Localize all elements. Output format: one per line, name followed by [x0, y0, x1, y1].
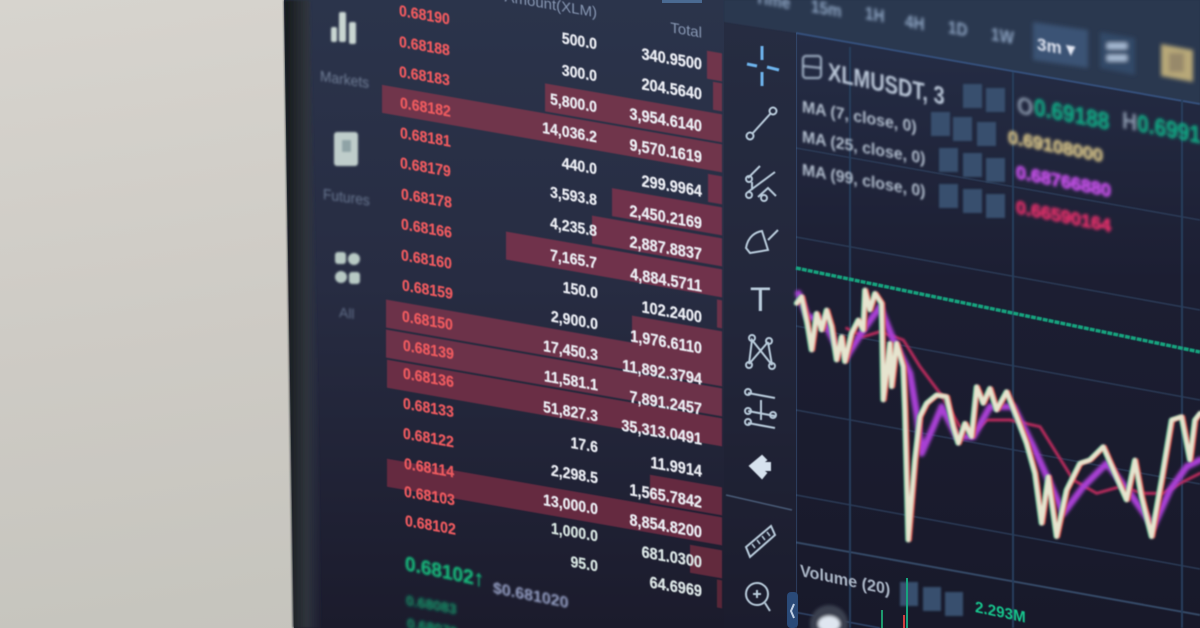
tab strip: 1D [948, 17, 968, 41]
amount column: 500.0 [562, 30, 597, 54]
total column: 1,976.6110 [630, 328, 702, 358]
price column: 0.68114 [404, 455, 455, 482]
sidebar icon: all [335, 252, 360, 284]
amount column: 95.0 [571, 553, 598, 576]
price column: 0.68183 [399, 63, 450, 90]
tool: back arrow [750, 456, 770, 478]
high label and value: H0.6991 [1122, 106, 1200, 149]
symbol legend [802, 56, 945, 201]
total column: 7,891.2457 [629, 388, 702, 419]
total column: 340.9500 [642, 46, 702, 74]
MA 25 line [798, 293, 1200, 527]
last price value: 0.68102↑ [405, 550, 484, 592]
header accent bar [662, 0, 702, 3]
tool: crosshair [747, 46, 779, 86]
price column: 0.68122 [403, 425, 454, 452]
monitor screen [284, 0, 1200, 628]
price column: 0.68103 [404, 483, 455, 510]
MA 99 line [847, 328, 1200, 493]
price column [399, 2, 456, 539]
candlesticks red edge [799, 290, 1200, 540]
price column: 0.68160 [401, 246, 452, 273]
price column: 0.68136 [403, 365, 454, 392]
tab strip: 1W [991, 24, 1014, 48]
MA 25 value: 0.68766880 [1016, 162, 1111, 201]
total column: 681.0300 [642, 544, 702, 572]
amount column: 11,581.1 [544, 367, 598, 395]
amount column: 4,235.8 [550, 215, 597, 241]
header: Total: Total [670, 19, 702, 42]
price column: 0.68150 [402, 308, 453, 334]
legend: MA 7: MA (7, close, 0) [802, 98, 917, 136]
amount column: 3,593.8 [550, 184, 597, 210]
tool: fork [746, 166, 776, 201]
volume control buttons [900, 582, 963, 616]
sidebar icon: markets [331, 12, 356, 44]
tool: measure lines [745, 389, 776, 428]
price column: 0.68102 [405, 512, 456, 539]
amount column: 5,800.0 [550, 91, 597, 117]
toolbar divider [726, 495, 792, 510]
order book depth bars [382, 0, 722, 608]
volume label: Volume (20) [800, 561, 890, 599]
total column: 204.5640 [642, 76, 702, 104]
tab strip [755, 0, 1014, 48]
tool: pattern [746, 335, 775, 369]
total column: 4,884.5711 [630, 266, 702, 296]
amount column: 1,000.0 [551, 520, 598, 546]
amount column: 2,298.5 [551, 462, 598, 488]
tab strip: 4H [905, 11, 925, 35]
top tab strip background [724, 0, 1200, 104]
button: 3m [1033, 22, 1088, 68]
price column: 0.68133 [403, 395, 454, 422]
lower green prices: 0.68083 [406, 592, 457, 617]
legend values [1008, 91, 1200, 236]
MA 7 value: 0.69108000 [1008, 127, 1103, 166]
sidebar icon: futures [334, 132, 358, 166]
amount column: 440.0 [562, 155, 597, 179]
total column: 8,854.8200 [629, 511, 702, 542]
toolbar column background [724, 0, 796, 628]
button: highlight [1161, 44, 1193, 82]
amount column: 17,450.3 [543, 337, 598, 365]
amount column: 13,000.0 [543, 491, 598, 519]
title: XLMUSDT, 3: XLMUSDT, 3 [828, 57, 945, 110]
price column: 0.68179 [400, 154, 451, 181]
price column: 0.68166 [401, 215, 452, 242]
total column: 11,892.3794 [622, 357, 702, 389]
total column: 9,570.1619 [629, 136, 702, 167]
volume bars [882, 578, 907, 628]
volume value: 2.293M [975, 599, 1026, 627]
price column: 0.68159 [402, 277, 453, 303]
legend: MA 99: MA (99, close, 0) [802, 161, 925, 201]
lower green prices [406, 592, 458, 628]
price column: 0.68139 [403, 337, 454, 364]
sidebar label: Markets: Markets [320, 69, 369, 92]
drawing toolbar [726, 46, 792, 611]
amount column: 14,036.2 [542, 119, 597, 147]
button label: 3m: 3m ▾ [1037, 34, 1076, 60]
tab strip: 1H [865, 3, 885, 27]
button: indicators [1100, 32, 1135, 75]
total column: 2,887.8837 [629, 233, 702, 264]
price column: 0.68182 [400, 94, 451, 121]
total column: 102.2400 [642, 299, 702, 327]
amount column: 2,900.0 [551, 308, 598, 334]
total column: 11.9914 [650, 454, 702, 481]
tool: trend line [746, 108, 776, 140]
order book header [505, 0, 702, 42]
total column [621, 42, 702, 601]
tool: ruler [746, 526, 775, 557]
tool: brush [746, 230, 778, 253]
sidebar label: Futures: Futures [323, 187, 370, 210]
amount column [542, 26, 598, 576]
volume panel [787, 561, 1026, 628]
usd price: $0.681020 [493, 579, 569, 612]
total column: 35,313.0491 [621, 417, 702, 449]
open value: 0.69188 [1034, 93, 1109, 135]
total column: 2,450.2169 [629, 202, 702, 233]
chart grid [794, 33, 1200, 628]
total column: 3,954.6140 [629, 105, 702, 136]
amount column: 300.0 [562, 62, 597, 86]
tool: zoom [746, 583, 770, 611]
price column: 0.68188 [399, 33, 450, 60]
price column: 0.68190 [399, 2, 450, 29]
collapse handle [787, 592, 798, 628]
floating cloud icon [810, 605, 848, 628]
sidebar label: All: All [339, 304, 355, 322]
tool: text: T [750, 281, 771, 319]
total column: 1,565.7842 [629, 481, 702, 512]
open label: O [1017, 91, 1033, 121]
candlesticks body [797, 290, 1200, 540]
legend icon [803, 56, 821, 78]
amount column: 51,827.3 [543, 398, 598, 426]
sidebar navigation [320, 12, 370, 322]
chart panel background [796, 0, 1200, 628]
amount column: 17.6 [571, 434, 598, 457]
MA 99 value: 0.66590164 [1016, 197, 1111, 236]
legend control buttons [931, 84, 1005, 218]
total column: 64.6969 [650, 574, 702, 601]
amount column: 150.0 [563, 279, 598, 303]
legend: MA 25: MA (25, close, 0) [802, 128, 925, 168]
green price line [796, 268, 1200, 352]
price column: 0.68181 [400, 124, 451, 151]
last price [405, 550, 569, 612]
total column: 299.9964 [642, 173, 702, 201]
monitor bezel [284, 0, 322, 628]
candlesticks green edge [795, 290, 1200, 540]
amount column: 7,165.7 [550, 247, 597, 273]
price column: 0.68178 [401, 185, 452, 212]
price chart [795, 290, 1200, 540]
